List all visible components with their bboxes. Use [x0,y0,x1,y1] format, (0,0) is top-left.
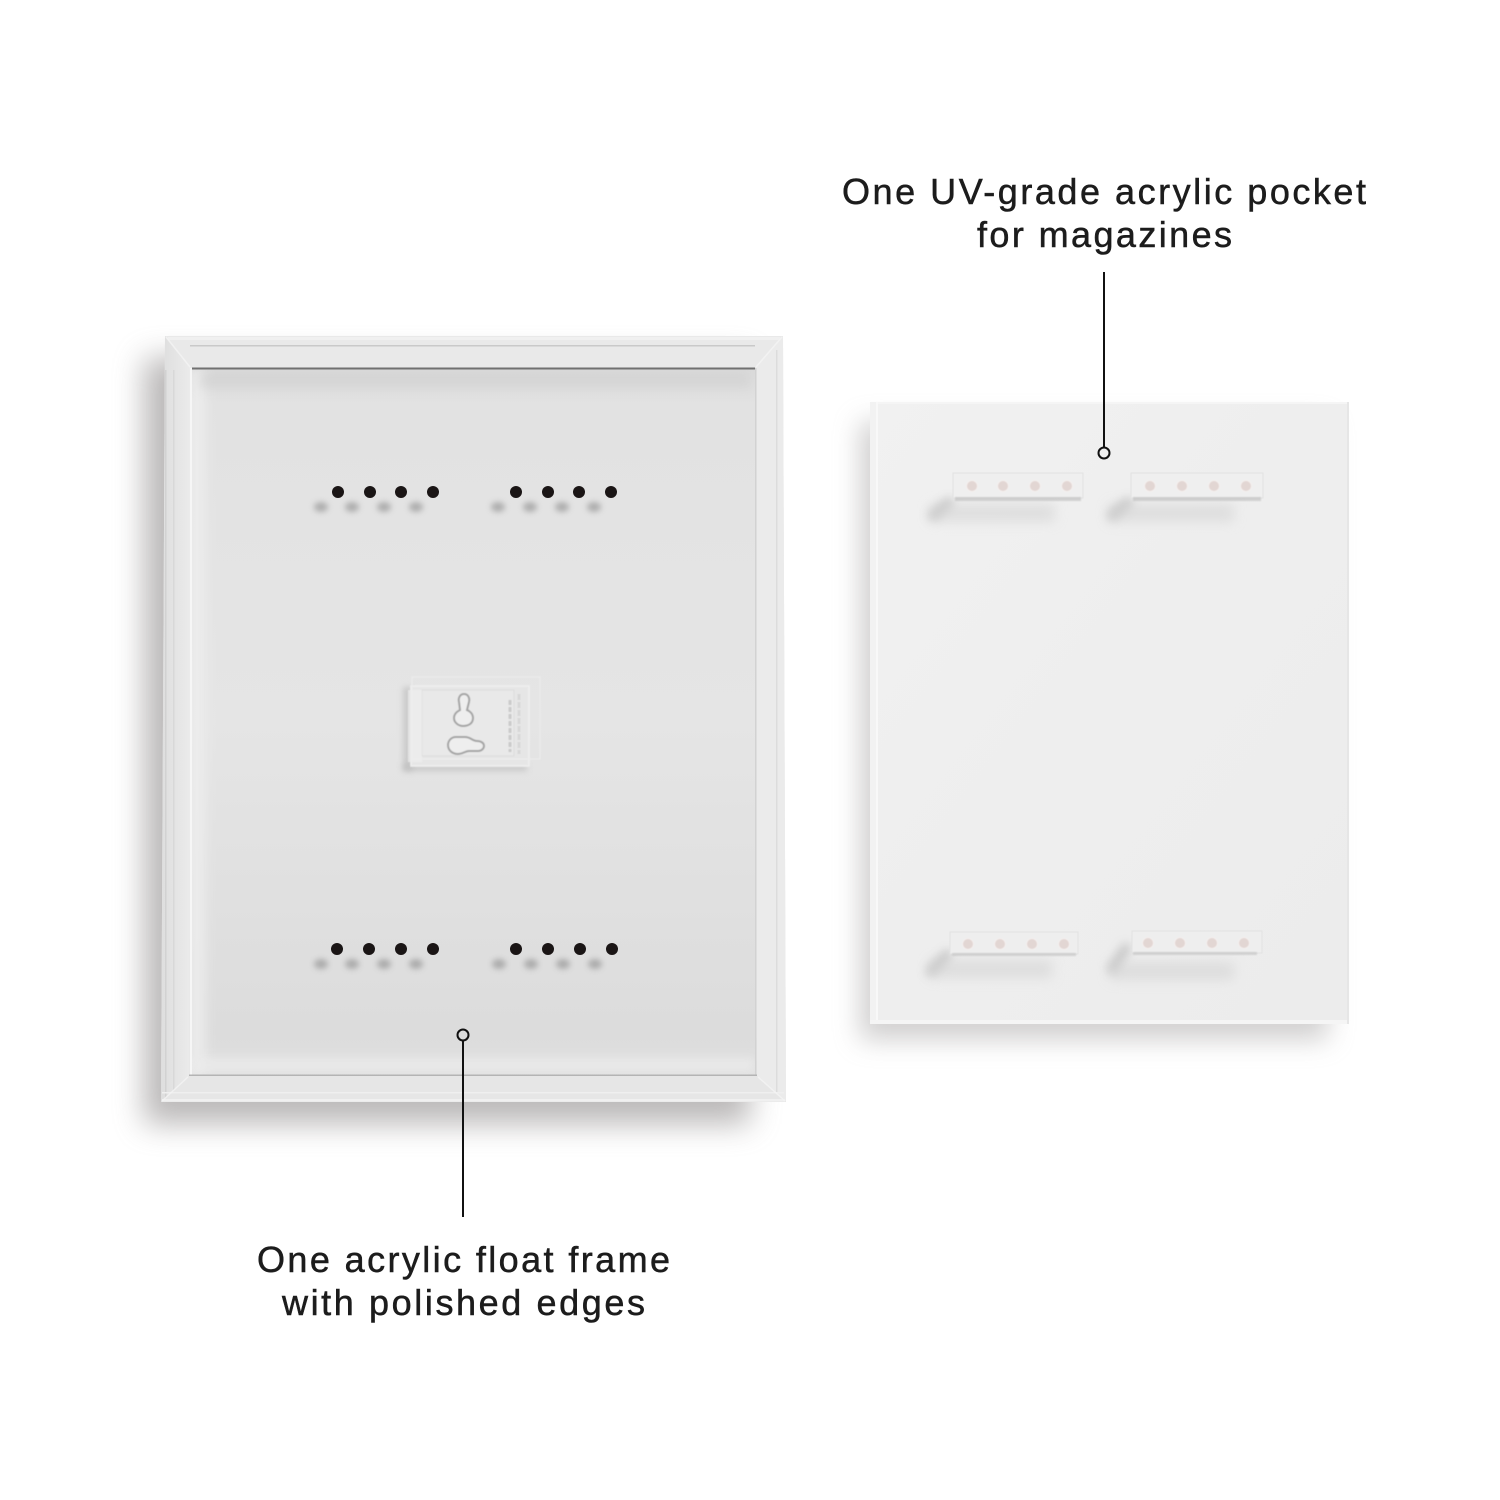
clear bracket: bottom right [1110,931,1262,980]
holes: bottom row [314,943,618,969]
holes: top row [314,486,617,512]
clear bracket: top right [1109,473,1263,522]
keyhole slot [454,694,473,726]
clear bracket: top left [930,473,1083,522]
leader line: pocket [1098,272,1110,458]
callout text: pocket: for magazines [977,214,1232,255]
panel: UV-grade acrylic pocket [860,402,1349,1040]
callout text: frame: One acrylic float frame [257,1239,670,1280]
callout: pocket label [842,171,1379,458]
leader line: frame [458,1030,468,1217]
frame outer body [161,336,786,1102]
wall mount plate with keyholes [403,677,540,771]
callout text: pocket: One UV-grade acrylic pocket [842,171,1366,212]
second slot [448,737,484,754]
callout: frame label [257,1030,682,1323]
frame top rail [165,336,783,368]
pocket drop shadow [860,422,1328,1040]
panel: acrylic float frame [144,336,786,1124]
callout text: frame: with polished edges [281,1282,645,1323]
pocket sheet [870,402,1349,1024]
frame bottom rail [161,1076,786,1102]
faint plate markings [508,700,512,752]
frame inner panel [192,369,755,1075]
frame right rail [755,336,786,1102]
frame corner mitres [162,337,785,1101]
frame left rail [161,336,192,1102]
frame drop shadow [144,358,750,1124]
clear bracket: bottom left [928,932,1078,978]
